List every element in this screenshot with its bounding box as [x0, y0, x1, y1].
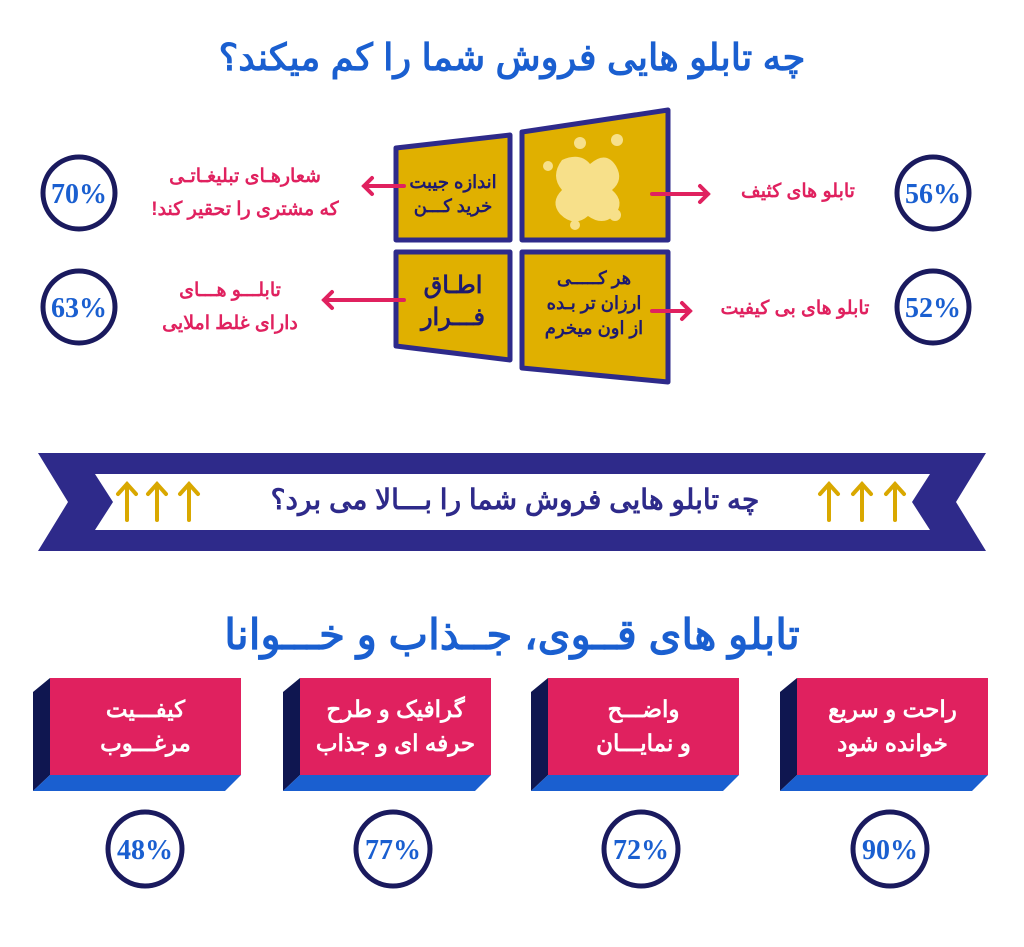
text: تابلو های بی کیفیت — [721, 298, 869, 319]
text: و نمایـــان — [596, 730, 691, 756]
banner text: چه تابلو هایی فروش شما را بـــالا می برد؟ — [271, 484, 759, 515]
circles — [43, 157, 969, 886]
pane texts: اندازه جیبت — [409, 172, 497, 192]
text: گرافیک و طرح — [326, 696, 465, 722]
text: که مشتری را تحقیر کند! — [151, 199, 339, 220]
window graphic: 52% — [905, 293, 961, 324]
text: فـــرار — [421, 304, 485, 331]
window graphic: 56% — [905, 179, 961, 210]
title: چه تابلو هایی فروش شما را کم میکند؟ — [219, 37, 805, 78]
text: دارای غلط املایی — [162, 313, 298, 334]
text: ارزان تر بـده — [547, 293, 641, 313]
text: هر کـــــی — [557, 268, 631, 288]
pane texts: خرید کـــن — [414, 196, 492, 216]
icon: splash — [543, 134, 623, 230]
window graphic: 70% — [51, 179, 107, 210]
text: واضـــح — [607, 696, 680, 722]
text: از اون میخرم — [545, 318, 643, 338]
text: خوانده شود — [837, 730, 948, 756]
text: حرفه ای و جذاب — [316, 730, 475, 756]
window graphic: 77% — [365, 835, 421, 866]
window graphic: 63% — [51, 293, 107, 324]
side labels: تابلو های کثیف — [741, 181, 855, 202]
text: اطـاق — [424, 272, 482, 299]
banner ribbon — [38, 453, 986, 551]
text: شعارهـای تبلیغـاتـی — [169, 166, 321, 187]
window graphic: 90% — [862, 835, 918, 866]
window graphic: 72% — [613, 835, 669, 866]
pane texts — [409, 172, 497, 217]
icon: up arrows — [118, 484, 904, 520]
box texts: کیفـــیت — [106, 696, 185, 722]
text: راحت و سریع — [828, 696, 957, 722]
box texts — [100, 696, 191, 757]
text: تابلـــو هـــای — [179, 280, 281, 301]
arrows — [324, 178, 708, 319]
bottom boxes — [33, 678, 988, 791]
window graphic: 48% — [117, 835, 173, 866]
subtitle: تابلو های قــوی، جــذاب و خـــوانا — [224, 611, 800, 658]
box texts: مرغـــوب — [100, 730, 191, 756]
